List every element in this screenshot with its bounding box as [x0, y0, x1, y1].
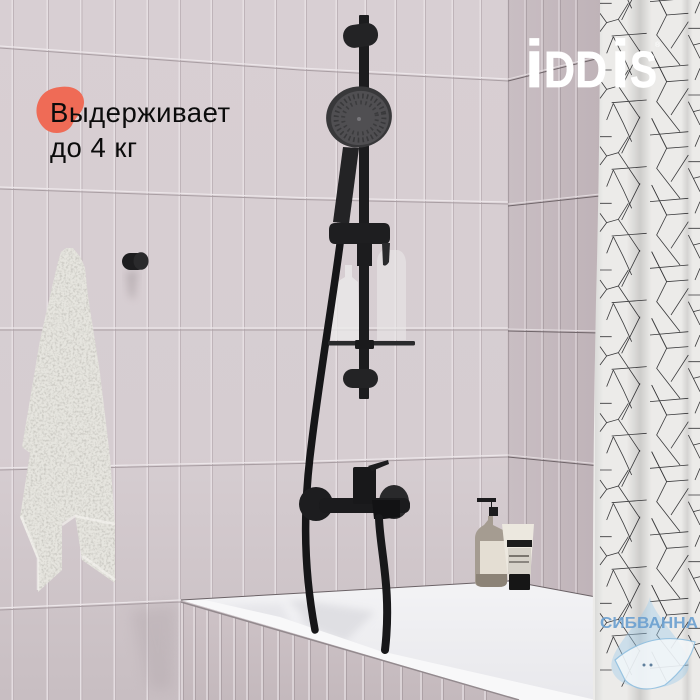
callout: weight capacity	[36, 87, 239, 163]
hand shower handle	[333, 147, 359, 224]
tub rim	[181, 600, 596, 700]
shower curtain	[590, 0, 700, 700]
logo: iDDiS: D	[575, 41, 607, 98]
watermark text: СИБВАННА	[600, 615, 698, 632]
wall mixer	[299, 460, 410, 650]
icon: water drop with tub	[611, 597, 695, 689]
lever	[368, 460, 389, 471]
wall shadows	[126, 270, 178, 690]
watermark: Сибванна	[600, 597, 698, 689]
left wall plate	[299, 487, 333, 521]
tiled back wall	[0, 0, 510, 700]
slider holder	[329, 223, 390, 244]
shower head	[320, 80, 398, 154]
logo: iDDiS: S	[630, 41, 657, 98]
cosmetic tube	[502, 524, 534, 590]
tiled side wall	[508, 0, 600, 600]
icon: wall hook	[122, 252, 148, 270]
outlet	[372, 500, 400, 519]
bottle right	[377, 250, 406, 340]
tub front tiles	[182, 602, 485, 700]
logo: iDDiS	[525, 27, 661, 102]
callout text: до 4 кг	[50, 132, 137, 163]
logo: iDDiS: D	[544, 41, 575, 98]
right wall plate	[379, 485, 409, 519]
towel	[20, 248, 115, 592]
second hose	[379, 518, 387, 650]
glass shelf	[328, 340, 415, 349]
logo: iDDiS: ®	[655, 41, 661, 49]
logo: iDDiS: i	[611, 27, 630, 102]
rail	[359, 15, 369, 399]
logo: iDDiS: i	[525, 27, 544, 102]
tub inner shading	[285, 600, 375, 642]
shower hose	[306, 228, 342, 630]
shower rail set	[306, 15, 415, 630]
soap dispenser	[475, 498, 507, 587]
callout text: Выдерживает	[50, 97, 231, 128]
bottom wall bracket	[343, 369, 378, 388]
tub back edge line	[181, 581, 596, 600]
top wall bracket	[342, 22, 379, 49]
tub body	[181, 581, 596, 700]
bathtub	[181, 581, 596, 700]
tub front panel	[181, 601, 520, 700]
bottle left	[331, 265, 360, 340]
mixer body	[353, 467, 376, 504]
mixer bar	[319, 498, 410, 513]
red accent blob	[36, 87, 84, 133]
